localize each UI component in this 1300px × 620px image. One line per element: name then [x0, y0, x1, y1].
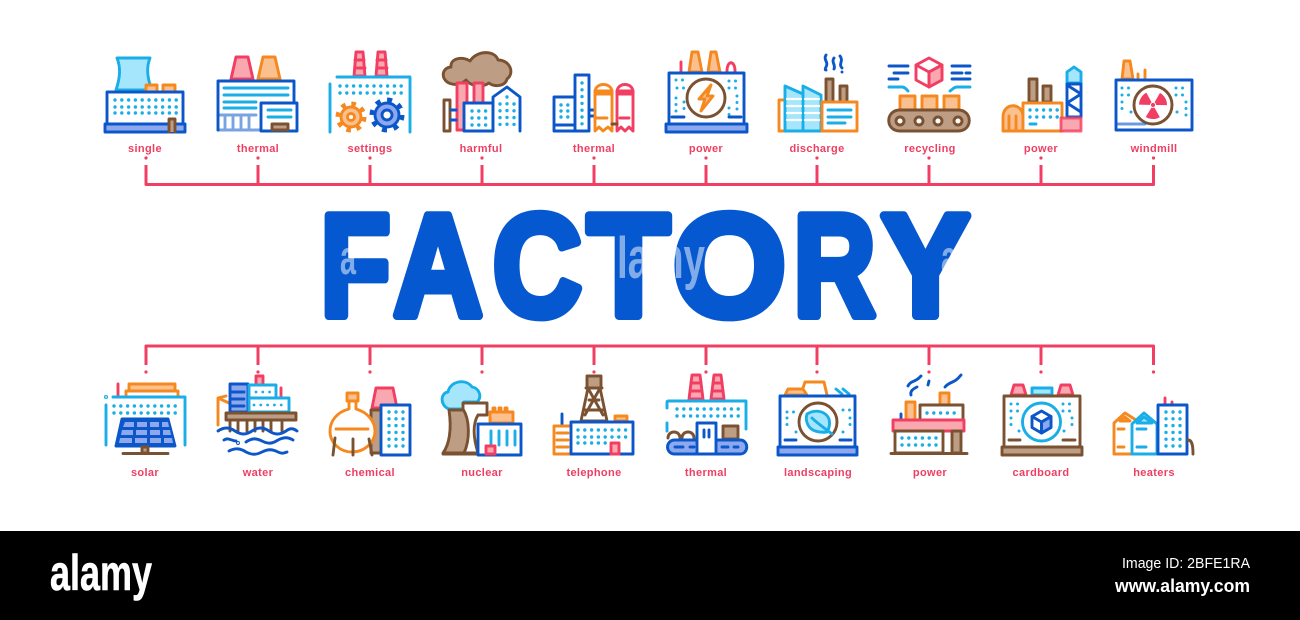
icon: power plant with tower: [1003, 67, 1081, 131]
title watermark: a: [340, 232, 356, 285]
top connector lines: [144, 156, 1155, 184]
label: nuclear: nuclear: [461, 467, 503, 479]
label: settings: settings: [348, 143, 392, 155]
label: power: power: [689, 143, 723, 155]
label: harmful: harmful: [460, 143, 502, 155]
label: power: power: [1024, 143, 1058, 155]
footer bar: [0, 531, 1300, 620]
title: A: [394, 184, 482, 346]
label: cardboard: cardboard: [1013, 467, 1069, 479]
icon: telephone tower plant: [554, 376, 633, 454]
label: water: water: [242, 467, 274, 479]
icon: landscaping plant with leaf: [778, 382, 857, 455]
title watermark: lamy: [617, 226, 705, 291]
label: landscaping: landscaping: [784, 467, 852, 479]
title watermark: a: [941, 232, 957, 285]
radiation symbol: [1141, 93, 1165, 117]
icon: power offshore plant: [891, 375, 967, 454]
title: O: [673, 184, 786, 346]
icon: nuclear plant: [442, 382, 521, 455]
icon: harmful emissions factory: [443, 53, 520, 131]
footer logo: alamy: [50, 545, 152, 601]
label: discharge: discharge: [789, 143, 845, 155]
icon: thermal factory with cooling cones: [218, 57, 297, 131]
gear: orange: [338, 104, 364, 130]
label: thermal: thermal: [573, 143, 615, 155]
label: power: power: [913, 467, 947, 479]
title: Y: [882, 184, 970, 346]
label: chemical: chemical: [345, 467, 395, 479]
icon: solar plant: [105, 384, 185, 454]
icon: water platform: [218, 376, 297, 454]
title: R: [794, 184, 876, 346]
bottom connector lines: [144, 346, 1155, 374]
icon: chemical flask plant: [330, 388, 410, 455]
icon: cardboard plant: [1002, 385, 1082, 455]
label: heaters: heaters: [1133, 467, 1175, 479]
icon: heaters buildings: [1114, 398, 1193, 454]
icon: thermal tanks and towers: [554, 75, 633, 131]
label: solar: solar: [131, 467, 159, 479]
icon: power station with lightning: [666, 52, 747, 132]
icon: settings factory with gears: [330, 52, 410, 132]
label: thermal: thermal: [237, 143, 279, 155]
title: C: [493, 184, 582, 346]
title: T: [588, 184, 670, 346]
icon: discharge factory: [779, 55, 857, 131]
label: thermal: thermal: [685, 467, 727, 479]
footer image id: Image ID: 2BFE1RA: [1122, 555, 1250, 572]
title: F: [320, 184, 390, 346]
label: telephone: telephone: [566, 467, 622, 479]
title watermark: [340, 226, 957, 291]
label: recycling: recycling: [904, 143, 956, 155]
footer website: www.alamy.com: [1114, 576, 1250, 596]
icon: radiation plant: [1116, 61, 1192, 130]
gear: blue: [372, 100, 402, 130]
label: windmill: windmill: [1130, 143, 1177, 155]
icon: thermal conveyor plant: [667, 375, 747, 454]
icon: recycling conveyor: [889, 58, 970, 131]
title: [320, 184, 970, 346]
label: single: single: [128, 143, 162, 155]
icon: single cooling tower factory: [105, 58, 185, 132]
